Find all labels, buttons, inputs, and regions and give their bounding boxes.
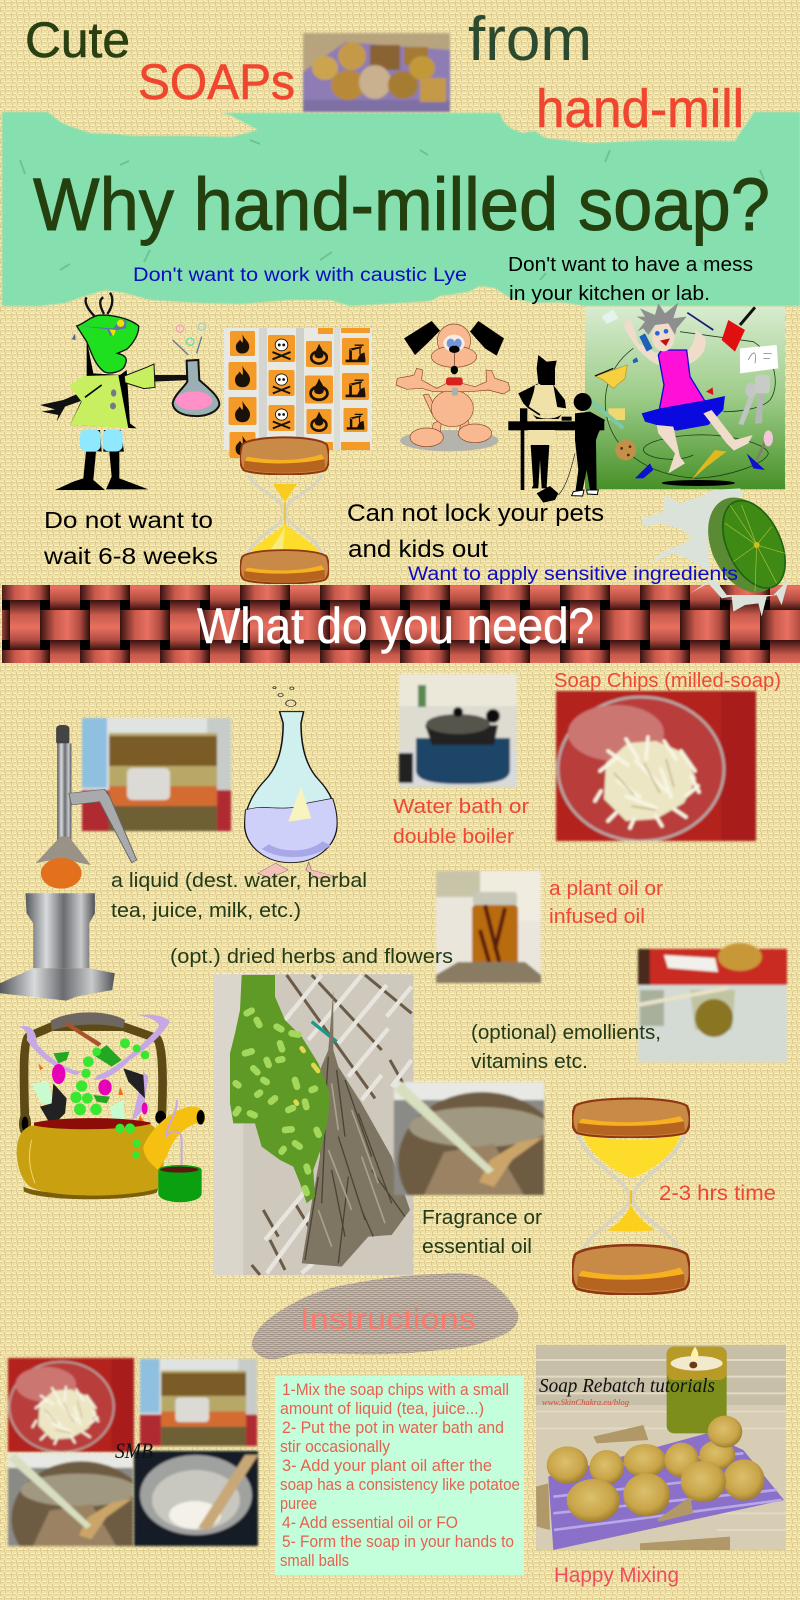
- panel: woven banner: [2, 585, 800, 663]
- icon: hourglass full top: [572, 1099, 690, 1294]
- title: Why hand-milled soap?: Why hand-milled soap?: [33, 163, 770, 246]
- panel: instruction steps: stir occasionally: [280, 1437, 390, 1456]
- illustration: silhouette of mother and child cooking: [508, 355, 605, 503]
- caption: emollients: [471, 1022, 661, 1073]
- illustration: kitchen mess woman: [585, 303, 785, 489]
- panel: instruction steps: soap has a consistency like potatoe: [280, 1475, 520, 1494]
- panel: instruction steps: amount of liquid (tea, juice...): [280, 1399, 484, 1418]
- panel: torn green banner: [2, 112, 800, 306]
- caption: water bath: [393, 796, 529, 848]
- caption: plant oil: [549, 878, 663, 928]
- caption: fragrance: [422, 1207, 542, 1258]
- overlay title: Soap Rebatch tutorials: [539, 1375, 715, 1397]
- caption: caustic lye: Don't want to work with caustic Lye: [133, 265, 467, 286]
- illustration: alien scientist: [40, 293, 219, 490]
- caption: kitchen mess: Don't want to have a mess: [508, 254, 753, 276]
- photo: dried herbs on trellis: [213, 974, 413, 1275]
- photo: plate of soaps: [303, 33, 450, 112]
- illustration: lime with milk splash: [642, 486, 798, 617]
- illustration: round flask: [245, 687, 337, 878]
- caption: emollients: (optional) emollients,: [471, 1022, 661, 1044]
- icon: hourglass nearly empty top: [240, 437, 329, 583]
- caption: Happy Mixing: Happy Mixing: [554, 1564, 679, 1587]
- photo: spoon in melting soap: [394, 1082, 566, 1232]
- heading: Instructions: Instructions: [300, 1303, 476, 1336]
- caption: plant oil: a plant oil or: [549, 878, 663, 900]
- photo: soap chips: [556, 691, 756, 841]
- caption: fragrance: essential oil: [422, 1236, 532, 1258]
- heading: What do you need?: What do you need?: [197, 598, 594, 654]
- title word: Cute: Cute: [25, 12, 130, 68]
- panel: instruction steps: 4- Add essential oil or FO: [282, 1513, 458, 1532]
- caption: a liquid: [111, 870, 367, 922]
- panel: instruction steps: 3- Add your plant oil after the: [282, 1456, 492, 1475]
- illustration: citrus juicer: [0, 725, 137, 1001]
- caption: water bath: Water bath or: [393, 796, 529, 818]
- photo: pot in water bath: [399, 674, 517, 787]
- panel: instruction steps: 5- Form the soap in your hands to: [282, 1532, 514, 1551]
- caption: a liquid: a liquid (dest. water, herbal: [111, 870, 367, 892]
- caption: pets and kids: [347, 500, 604, 563]
- overlay url: www.SkinChakra.eu/blog: [542, 1398, 629, 1407]
- caption: plant oil: infused oil: [549, 906, 645, 928]
- caption: do not want to wait: wait 6-8 weeks: [43, 543, 218, 569]
- caption: do not want to wait: Do not want to: [44, 507, 213, 533]
- caption: pets and kids: Can not lock your pets: [347, 500, 604, 527]
- caption: do not want to wait: [43, 507, 218, 569]
- caption: a liquid: tea, juice, milk, etc.): [111, 900, 301, 922]
- photo collage: steps: [8, 1358, 258, 1576]
- caption: soap chips: Soap Chips (milled-soap): [554, 670, 781, 692]
- caption: water bath: double boiler: [393, 826, 514, 848]
- photo: hazard symbols: [224, 328, 372, 458]
- panel: instructions blob: [252, 1273, 518, 1359]
- photo: emollient on scale: [638, 943, 787, 1062]
- caption: sensitive ingredients: Want to apply sensitive ingredients: [408, 564, 738, 585]
- caption: dried herbs: (opt.) dried herbs and flowers: [170, 946, 453, 968]
- signature: SMB: [115, 1438, 153, 1463]
- caption: emollients: vitamins etc.: [471, 1051, 588, 1073]
- panel: instruction steps: [275, 1376, 524, 1575]
- caption: time: 2-3 hrs time: [659, 1182, 776, 1205]
- panel: instruction steps: 2- Put the pot in water bath and: [282, 1418, 504, 1437]
- title word: from: from: [468, 5, 592, 74]
- panel: instruction steps: puree: [280, 1494, 317, 1513]
- illustration: surprised dog: [396, 321, 510, 451]
- caption: pets and kids: and kids out: [348, 536, 488, 563]
- caption: kitchen mess: in your kitchen or lab.: [509, 283, 710, 305]
- photo: finished soap balls with candle: [536, 1345, 786, 1550]
- caption: fragrance: Fragrance or: [422, 1207, 542, 1229]
- photo: jar of infused oil: [436, 871, 541, 983]
- title word: SOAPs: SOAPs: [138, 54, 295, 110]
- panel: instruction steps: 1-Mix the soap chips with a small: [282, 1380, 509, 1399]
- caption: kitchen mess: [508, 254, 753, 305]
- panel: instruction steps: small balls: [280, 1551, 349, 1570]
- title word: hand-mill: hand-mill: [536, 79, 744, 139]
- illustration: kettle of herbal tea: [17, 1012, 205, 1202]
- photo: beaker of liquid: [82, 718, 231, 831]
